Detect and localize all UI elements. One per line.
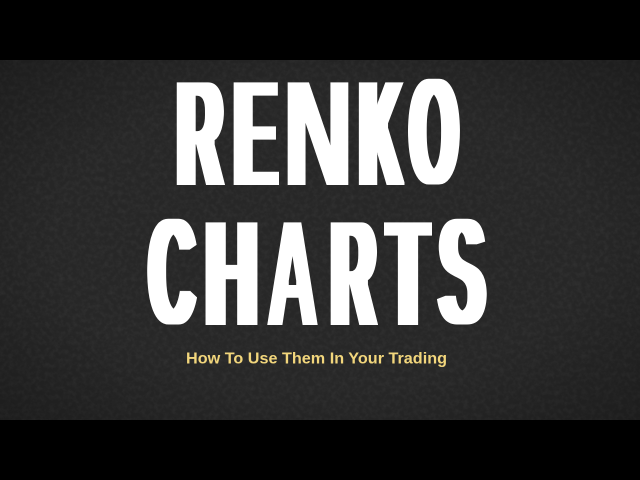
title: RENKO: O: [410, 45, 458, 218]
title: RENKO: E: [234, 48, 277, 221]
title: CHARTS: H: [206, 187, 257, 360]
title: RENKO: [178, 45, 458, 221]
title: RENKO: N: [284, 48, 352, 221]
subtitle: How To Use Them In Your Trading: [186, 350, 447, 368]
title: RENKO: K: [360, 47, 402, 220]
title: CHARTS: C: [150, 186, 194, 359]
title: CHARTS: T: [386, 187, 430, 360]
title: CHARTS: A: [268, 188, 317, 361]
title: CHARTS: S: [440, 186, 484, 359]
title: RENKO: R: [178, 48, 222, 221]
title: CHARTS: R: [332, 186, 375, 360]
title: CHARTS: [150, 186, 484, 361]
